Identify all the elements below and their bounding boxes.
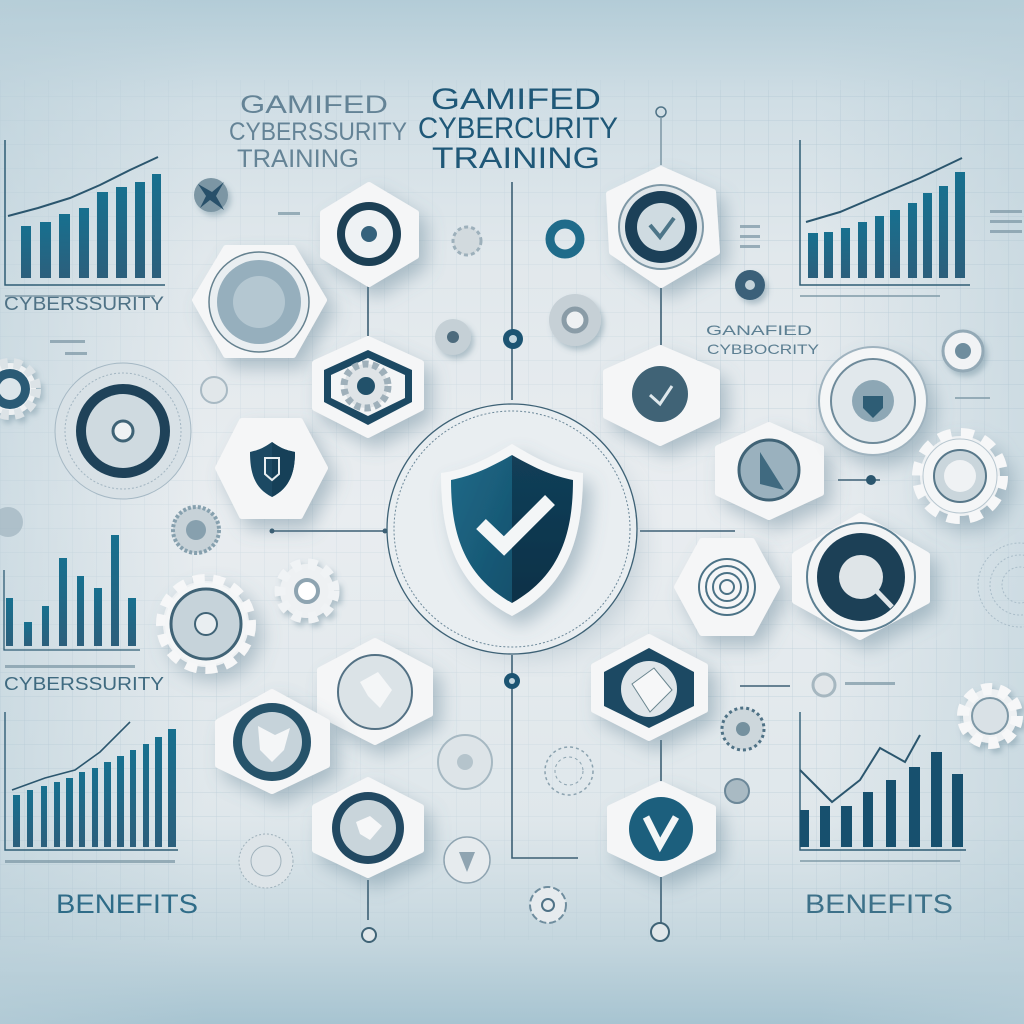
- title: left faded: TRAINING: [237, 145, 359, 173]
- faded label: gamified right: CYBBOCRITY: [707, 341, 820, 357]
- gear: small centre left: [280, 564, 334, 618]
- central shield emblem: [387, 404, 640, 655]
- hex badge: top: [323, 185, 416, 284]
- title: centre: [418, 83, 618, 175]
- gear: far right: [963, 689, 1017, 743]
- icon: check mark: [481, 500, 550, 546]
- label: benefits right: BENEFITS: [805, 889, 953, 919]
- gear: edge left: [0, 363, 36, 415]
- chart: bottom right: [800, 712, 966, 850]
- title: centre: GAMIFED: [431, 83, 601, 116]
- faded label: gamified right: GANAFIED: [706, 322, 812, 338]
- title: centre: TRAINING: [432, 142, 600, 175]
- hex badge: lower right: [594, 637, 705, 738]
- target: right edge: [978, 543, 1024, 627]
- hex badge: gear: [315, 339, 421, 435]
- small icons: [0, 107, 983, 942]
- chart: top right: [800, 140, 970, 285]
- title: left faded: CYBERSSURITY: [229, 118, 407, 146]
- hex badge: right upper: [606, 348, 717, 443]
- gear: right: [920, 436, 1000, 516]
- faded label: gamified right: [706, 322, 820, 357]
- hex badge: lower left: [218, 692, 327, 791]
- label: benefits left: BENEFITS: [56, 889, 198, 919]
- chart: middle left: [4, 535, 140, 650]
- title: left faded: GAMIFED: [240, 91, 388, 119]
- title: centre: CYBERCURITY: [418, 112, 618, 145]
- chart: top left: [5, 140, 165, 285]
- hex badge: top right check: [609, 169, 717, 285]
- hex badge: large right: [795, 516, 927, 637]
- title: left faded: [229, 91, 407, 173]
- hex badge: lower centre: [320, 641, 430, 742]
- hex badge: bottom: [315, 780, 421, 875]
- icon: shield: [441, 444, 583, 616]
- hex badge: top left circle: [195, 248, 324, 355]
- decorative micro text marks: [5, 210, 1022, 863]
- hex badge: fingerprint: [677, 541, 777, 633]
- target: left concentric: [55, 363, 191, 499]
- label: cybersecurity lower: CYBERSSURITY: [4, 674, 164, 694]
- hex badge: small shield: [218, 421, 325, 516]
- gear: left badge: [163, 581, 249, 667]
- hex badge: bottom right V: [610, 784, 713, 874]
- round badge: right top: [819, 347, 927, 455]
- connector lines: [270, 182, 880, 925]
- label: cybersecurity top: CYBERSSURITY: [4, 294, 164, 315]
- chart: bottom left: [5, 712, 178, 850]
- hex badge: right mid: [718, 425, 821, 517]
